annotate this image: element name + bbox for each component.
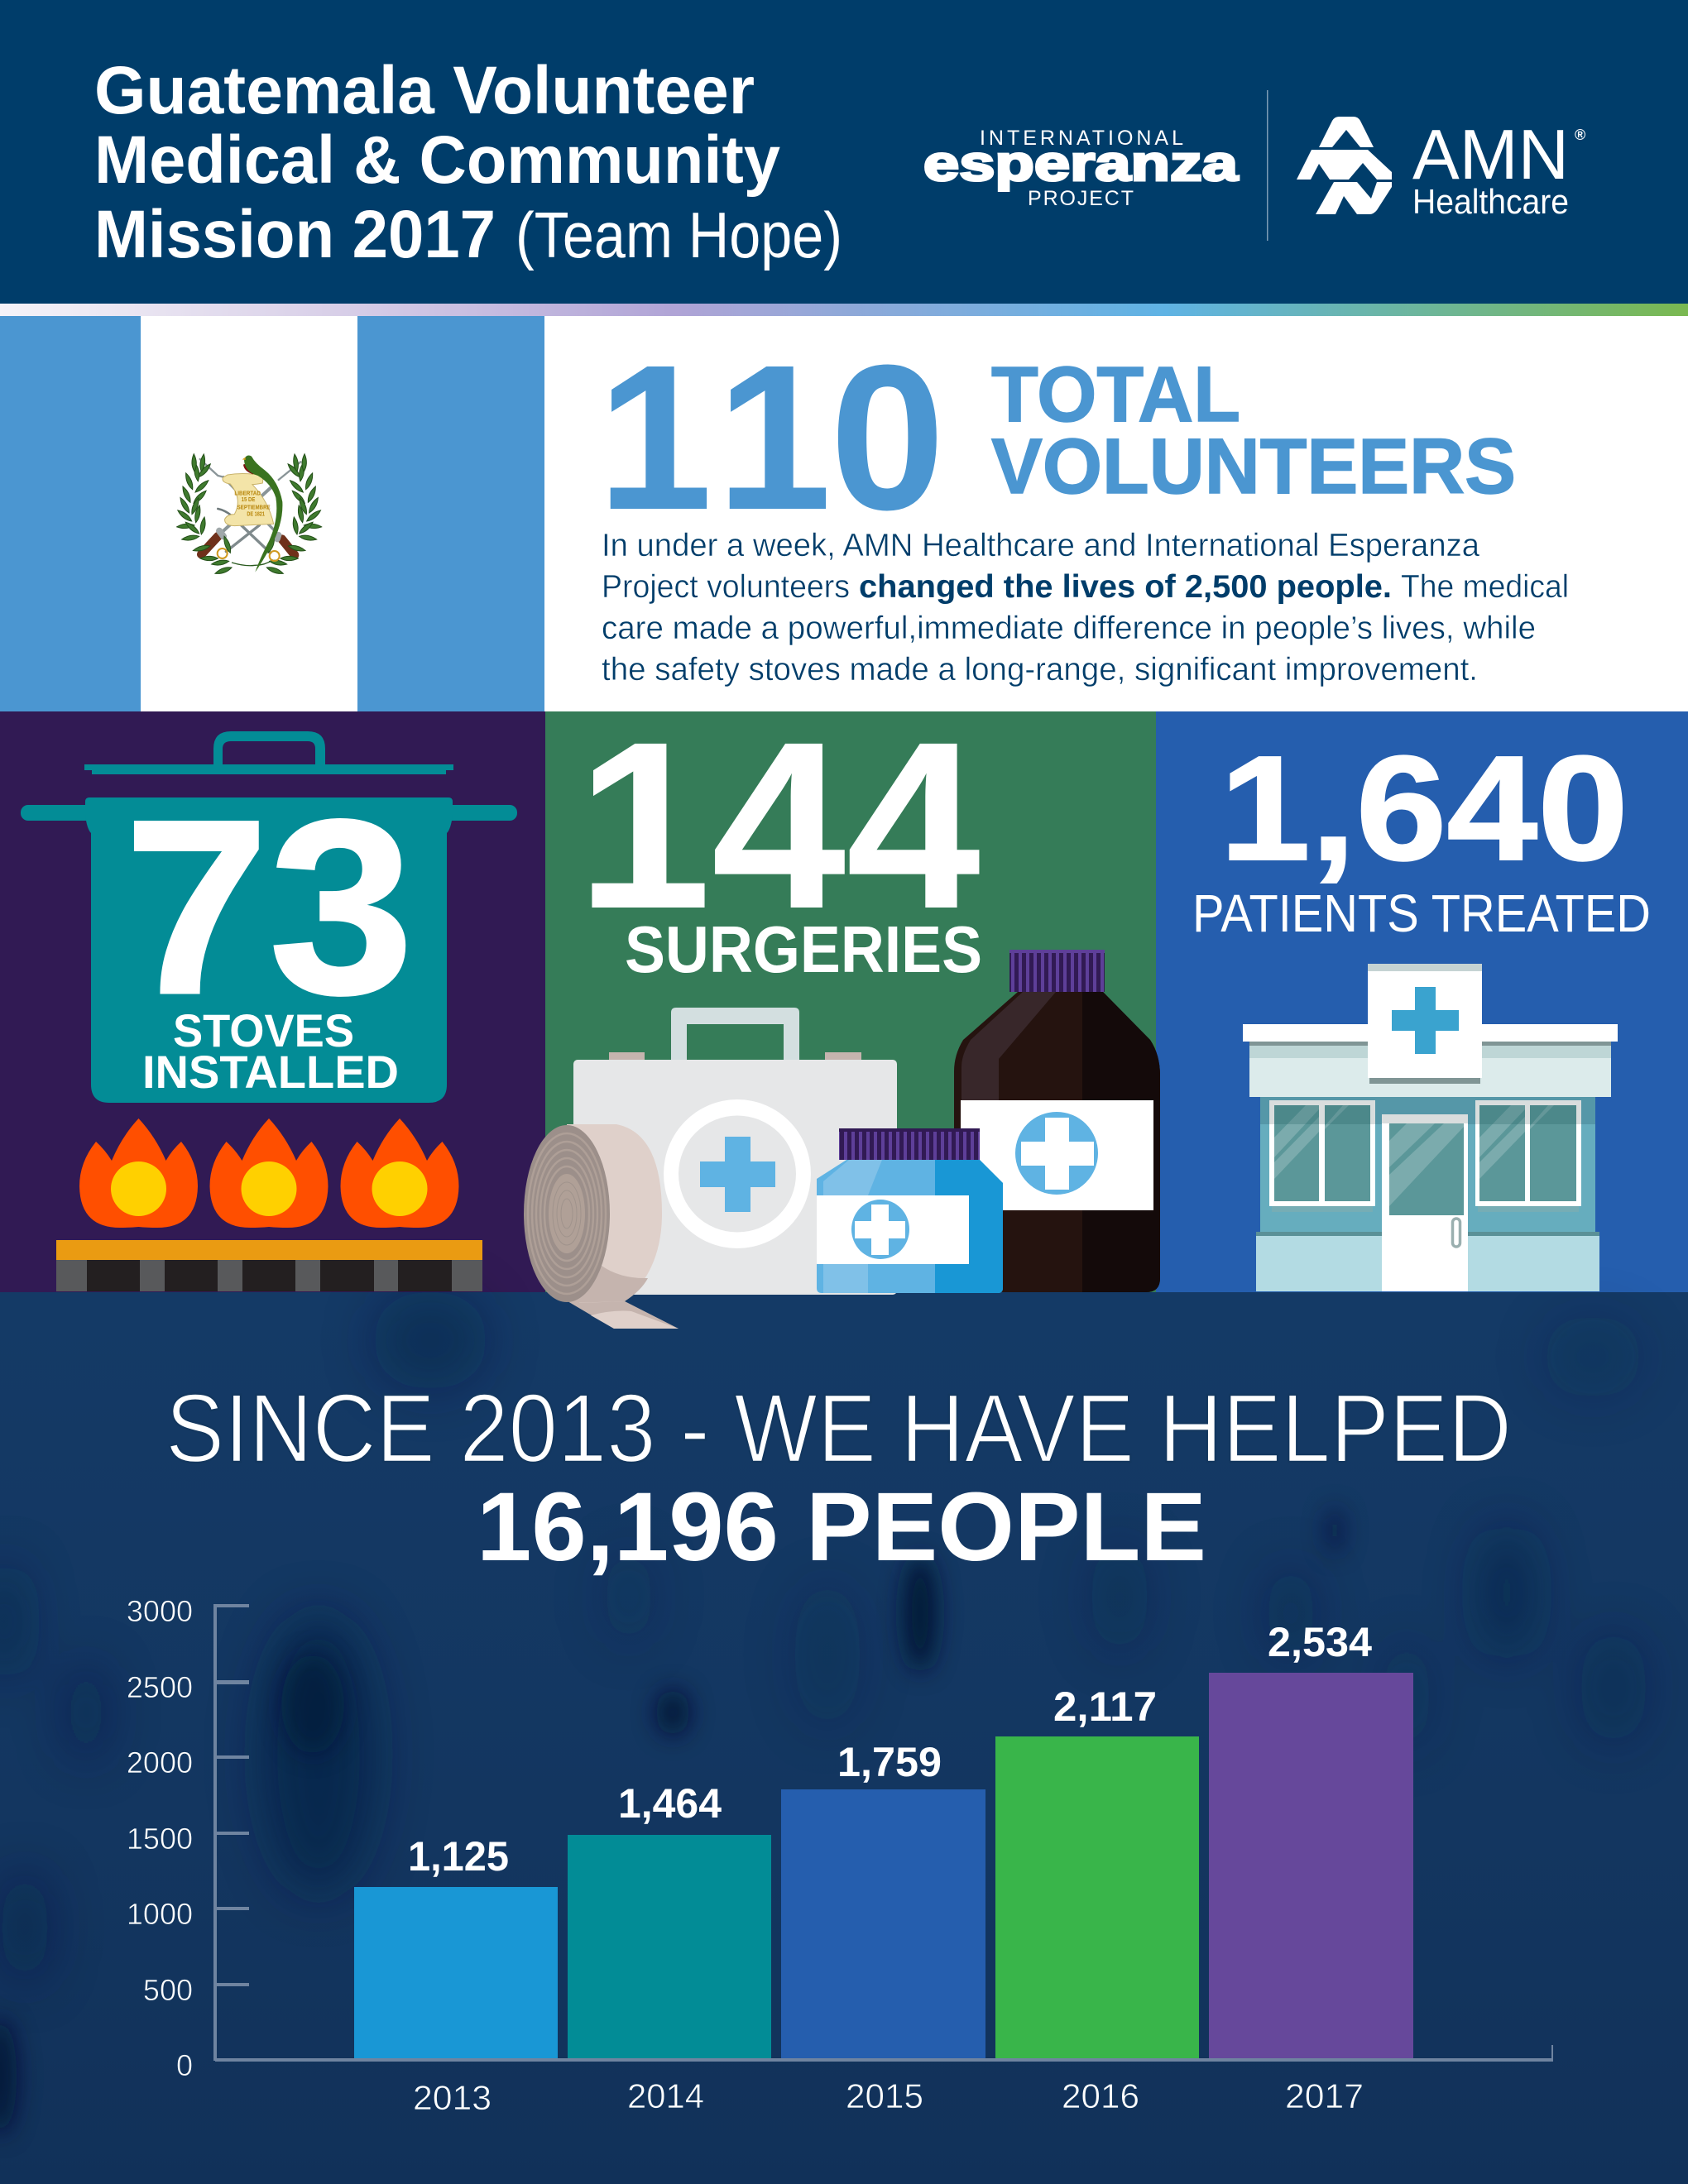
bar value labels: 2,534 bbox=[1268, 1619, 1372, 1665]
heading: total volunteers: TOTAL bbox=[991, 351, 1240, 438]
door bbox=[1382, 1114, 1468, 1291]
x axis labels: 2015 bbox=[846, 2076, 923, 2115]
label: surgeries: SURGERIES bbox=[625, 912, 982, 986]
icon: small medicine bottle bbox=[815, 1128, 1005, 1295]
bar value labels bbox=[408, 1619, 1372, 1880]
body paragraph bbox=[602, 528, 1569, 687]
icon: flames bbox=[79, 1118, 458, 1228]
y axis labels: 2000 bbox=[127, 1746, 193, 1779]
panel: Guatemala flag bbox=[0, 316, 544, 711]
label: patients treated: PATIENTS TREATED bbox=[1192, 884, 1651, 943]
icon: coat of arms: DE 1821 bbox=[247, 512, 265, 518]
logo: AMN Healthcare: Healthcare bbox=[1412, 182, 1569, 221]
lower section background bbox=[0, 1291, 1688, 2184]
label: stoves installed: INSTALLED bbox=[142, 1046, 399, 1098]
panel: stoves installed bbox=[21, 731, 517, 1291]
gradient divider bar bbox=[0, 304, 1688, 316]
logo: International Esperanza Project: esperanza bbox=[923, 136, 1239, 191]
wreath bbox=[176, 454, 322, 576]
body paragraph: changed the lives of 2,500 people. bbox=[859, 569, 1392, 605]
body paragraph: In under a week, AMN Healthcare and International Esperanza bbox=[602, 528, 1479, 563]
body paragraph: The medical bbox=[1401, 569, 1569, 605]
bars bbox=[354, 1673, 1413, 2058]
bar value labels: 1,759 bbox=[837, 1739, 942, 1785]
heading: total volunteers: VOLUNTEERS bbox=[991, 423, 1516, 510]
icon: coat of arms: SEPTIEMBRE bbox=[237, 505, 271, 511]
header banner bbox=[0, 0, 1688, 304]
title bbox=[94, 53, 842, 272]
icon: coat of arms bbox=[176, 454, 322, 576]
logo: International Esperanza Project bbox=[923, 127, 1239, 210]
bar value labels: 1,464 bbox=[618, 1780, 722, 1827]
panel backgrounds: stat columns bbox=[0, 711, 1688, 1292]
left window bbox=[1269, 1100, 1375, 1212]
logo: International Esperanza Project: PROJECT bbox=[1028, 187, 1134, 210]
label: stoves installed: STOVES bbox=[173, 1004, 354, 1056]
big number 110: 110 bbox=[597, 322, 945, 553]
big number 73: 73 bbox=[124, 768, 414, 1046]
scroll bbox=[223, 474, 274, 526]
body paragraph: care made a powerful,immediate difference in people’s lives, while bbox=[602, 611, 1536, 646]
x axis labels: 2014 bbox=[627, 2076, 704, 2115]
right window bbox=[1475, 1100, 1581, 1212]
panel: surgeries bbox=[524, 692, 1163, 1329]
icon: coat of arms: 15 DE bbox=[242, 497, 256, 503]
x axis labels: 2016 bbox=[1062, 2076, 1139, 2115]
heading: total volunteers bbox=[991, 351, 1516, 510]
title: (Team Hope) bbox=[516, 199, 842, 271]
icon: stove burner bbox=[56, 1240, 482, 1291]
sword hilts bbox=[218, 548, 280, 561]
chart axes bbox=[213, 1604, 1553, 2062]
heading: 16,196 people: 16,196 PEOPLE bbox=[477, 1473, 1206, 1582]
y axis labels: 2500 bbox=[127, 1670, 193, 1704]
body paragraph: Project volunteers bbox=[602, 569, 850, 605]
label: stoves installed bbox=[142, 1004, 399, 1098]
icon: coat of arms: LIBERTAD bbox=[234, 491, 261, 496]
icon: large medicine bottle bbox=[952, 950, 1163, 1295]
y axis labels: 0 bbox=[176, 2048, 193, 2082]
big number 144: 144 bbox=[577, 692, 982, 959]
logo divider bbox=[1267, 90, 1268, 241]
logo: AMN Healthcare bbox=[1297, 116, 1585, 221]
body paragraph: the safety stoves made a long-range, significant improvement. bbox=[602, 652, 1478, 687]
icon: first aid kit bbox=[573, 1008, 897, 1295]
y axis labels: 1000 bbox=[127, 1897, 193, 1931]
quetzal bbox=[243, 463, 255, 474]
panel: patients treated bbox=[1192, 726, 1651, 1291]
x axis labels bbox=[413, 2076, 1364, 2117]
y axis labels: 500 bbox=[143, 1973, 193, 2007]
x axis labels: 2013 bbox=[413, 2078, 492, 2117]
bar value labels: 2,117 bbox=[1053, 1684, 1157, 1730]
title: Guatemala Volunteer bbox=[94, 53, 755, 128]
bar chart bbox=[127, 1594, 1553, 2117]
logo: AMN Healthcare: AMN bbox=[1412, 116, 1569, 194]
y axis labels: 3000 bbox=[127, 1594, 193, 1628]
icon: bandage roll bbox=[524, 1124, 679, 1329]
big number 1,640: 1,640 bbox=[1220, 726, 1628, 892]
logo: International Esperanza Project: INTERNATIONAL bbox=[980, 127, 1183, 150]
panel: total volunteers bbox=[544, 316, 1688, 711]
icon: pot bbox=[21, 731, 517, 1103]
icon: clinic building bbox=[1243, 964, 1618, 1291]
y axis labels: 1500 bbox=[127, 1822, 193, 1856]
logo: AMN Healthcare: ® bbox=[1575, 127, 1585, 143]
x axis labels: 2017 bbox=[1285, 2076, 1364, 2115]
title: Medical & Community bbox=[94, 122, 780, 198]
y axis labels bbox=[127, 1594, 193, 2082]
bar value labels: 1,125 bbox=[408, 1833, 509, 1880]
title: Mission 2017 bbox=[94, 197, 496, 272]
heading: since 2013: SINCE 2013 - WE HAVE HELPED bbox=[165, 1374, 1512, 1483]
